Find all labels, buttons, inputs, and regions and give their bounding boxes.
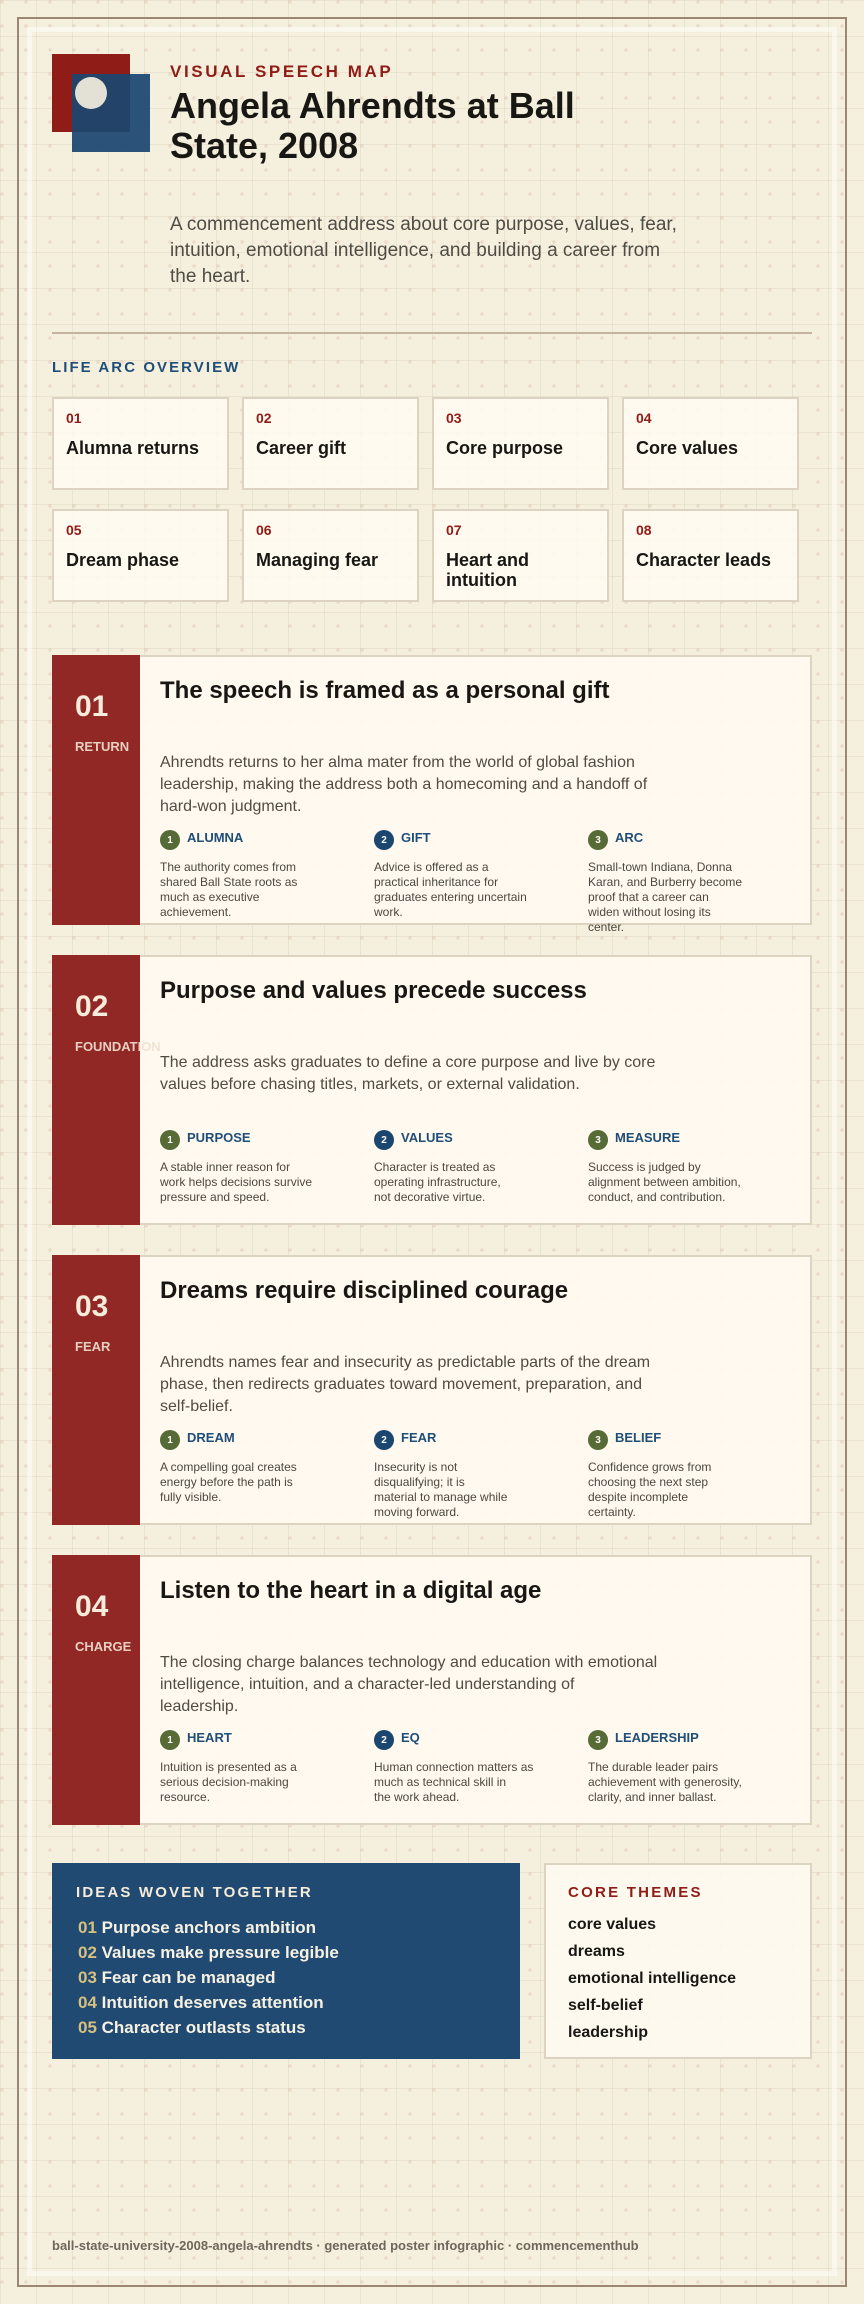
card 01 xyxy=(52,397,229,490)
section text: phase, then redirects graduates toward movement, preparation, and xyxy=(160,1376,642,1393)
card 02: Career gift xyxy=(256,438,346,458)
intro text: A commencement address about core purpose, values, fear, xyxy=(170,214,677,235)
section heading: Listen to the heart in a digital age xyxy=(160,1577,541,1604)
item: eq: much as technical skill in xyxy=(374,1775,506,1789)
item: dream: 1 xyxy=(167,1435,173,1446)
title: State, 2008 xyxy=(170,125,358,166)
ideas list: 01 Purpose anchors ambition xyxy=(78,1918,316,1937)
item: alumna: shared Ball State roots as xyxy=(160,875,297,889)
item: values: Character is treated as xyxy=(374,1160,495,1174)
item: belief: Confidence grows from xyxy=(588,1460,711,1474)
panel: ideas woven together xyxy=(52,1863,520,2059)
item: heart: serious decision-making xyxy=(160,1775,289,1789)
item: heart: 1 xyxy=(167,1735,173,1746)
card 06: 06 xyxy=(256,522,272,538)
item: arc: ARC xyxy=(615,830,643,845)
section heading: Purpose and values precede success xyxy=(160,977,587,1004)
item: measure: alignment between ambition, xyxy=(588,1175,741,1189)
card 08: Character leads xyxy=(636,550,771,570)
section number band: RETURN xyxy=(75,739,129,754)
item: fear: 2 xyxy=(381,1435,387,1446)
section text: hard-won judgment. xyxy=(160,798,301,815)
item: arc xyxy=(588,830,742,934)
themes list: self-belief xyxy=(568,1997,643,2014)
ideas list: 03 Fear can be managed xyxy=(78,1968,276,1987)
ideas list xyxy=(78,1918,339,2037)
card 07: 07 xyxy=(446,522,462,538)
section number band: FOUNDATION xyxy=(75,1039,161,1054)
item: belief: certainty. xyxy=(588,1505,636,1519)
themes list: core values xyxy=(568,1916,656,1933)
eyebrow: VISUAL SPEECH MAP xyxy=(170,62,393,81)
item: alumna xyxy=(160,830,297,919)
ideas list: 05 Character outlasts status xyxy=(78,2018,306,2037)
item: purpose: PURPOSE xyxy=(187,1130,251,1145)
card 05: 05 xyxy=(66,522,82,538)
heading: life arc overview: LIFE ARC OVERVIEW xyxy=(52,359,240,376)
card 07: intuition xyxy=(446,570,517,590)
item: purpose xyxy=(160,1130,312,1204)
section text xyxy=(160,1654,657,1715)
card 04: Core values xyxy=(636,438,738,458)
section number band: 04 xyxy=(75,1590,108,1623)
item: arc: proof that a career can xyxy=(588,890,709,904)
item: dream: A compelling goal creates xyxy=(160,1460,297,1474)
item: fear xyxy=(374,1430,507,1519)
item: fear: moving forward. xyxy=(374,1505,459,1519)
panel heading: CORE THEMES xyxy=(568,1884,703,1901)
item: belief: despite incomplete xyxy=(588,1490,688,1504)
section heading: Dreams require disciplined courage xyxy=(160,1277,568,1304)
item: gift xyxy=(374,830,527,919)
item: leadership: clarity, and inner ballast. xyxy=(588,1790,717,1804)
section number band xyxy=(52,955,140,1225)
section text: leadership, making the address both a homecoming and a handoff of xyxy=(160,776,647,793)
section text xyxy=(160,754,648,815)
panel heading: IDEAS WOVEN TOGETHER xyxy=(76,1884,313,1901)
item: values xyxy=(374,1130,501,1204)
item: measure: 3 xyxy=(595,1135,601,1146)
section text xyxy=(160,1354,650,1415)
item: purpose: pressure and speed. xyxy=(160,1190,269,1204)
card 07 xyxy=(432,509,609,602)
section number band: FEAR xyxy=(75,1339,110,1354)
item: leadership: 3 xyxy=(595,1735,601,1746)
item: purpose: 1 xyxy=(167,1135,173,1146)
themes list xyxy=(568,1916,736,2041)
item: eq: EQ xyxy=(401,1730,420,1745)
ideas list: 02 Values make pressure legible xyxy=(78,1943,339,1962)
divider xyxy=(52,332,812,334)
title: Angela Ahrendts at Ball xyxy=(170,85,575,126)
item: eq: the work ahead. xyxy=(374,1790,459,1804)
item: alumna: ALUMNA xyxy=(187,830,243,845)
panel: core themes xyxy=(544,1863,812,2059)
item: belief: BELIEF xyxy=(615,1430,661,1445)
item: eq: Human connection matters as xyxy=(374,1760,533,1774)
ideas list: 04 Intuition deserves attention xyxy=(78,1993,324,2012)
section text: The closing charge balances technology and education with emotional xyxy=(160,1654,657,1671)
section text: Ahrendts names fear and insecurity as predictable parts of the dream xyxy=(160,1354,650,1371)
item: gift: Advice is offered as a xyxy=(374,860,489,874)
section number band: 01 xyxy=(75,690,108,723)
section text: The address asks graduates to define a core purpose and live by core xyxy=(160,1054,655,1071)
card 01: Alumna returns xyxy=(66,438,199,458)
section text: Ahrendts returns to her alma mater from the world of global fashion xyxy=(160,754,635,771)
section number band: CHARGE xyxy=(75,1639,131,1654)
section number band xyxy=(52,655,140,925)
item: leadership: The durable leader pairs xyxy=(588,1760,718,1774)
card 05 xyxy=(52,509,229,602)
item: values: 2 xyxy=(381,1135,387,1146)
intro text: intuition, emotional intelligence, and building a career from xyxy=(170,240,660,261)
section number band xyxy=(52,1255,140,1525)
panel: section 02 xyxy=(52,955,812,1225)
item: leadership xyxy=(588,1730,742,1804)
card 02 xyxy=(242,397,419,490)
item: measure: Success is judged by xyxy=(588,1160,701,1174)
item: gift: practical inheritance for xyxy=(374,875,498,889)
item: dream: fully visible. xyxy=(160,1490,221,1504)
item: values: VALUES xyxy=(401,1130,453,1145)
card 06: Managing fear xyxy=(256,550,378,570)
section text: leadership. xyxy=(160,1698,238,1715)
item: belief xyxy=(588,1430,711,1519)
item: fear: material to manage while xyxy=(374,1490,507,1504)
item: dream: energy before the path is xyxy=(160,1475,293,1489)
item: eq xyxy=(374,1730,533,1804)
icon: overlapping squares logo xyxy=(52,54,150,152)
item: gift: work. xyxy=(374,905,403,919)
item: gift: graduates entering uncertain xyxy=(374,890,527,904)
card 08: 08 xyxy=(636,522,652,538)
section text: values before chasing titles, markets, or external validation. xyxy=(160,1076,580,1093)
item: fear: Insecurity is not xyxy=(374,1460,457,1474)
intro text xyxy=(170,214,677,287)
section number band: 02 xyxy=(75,990,108,1023)
themes list: dreams xyxy=(568,1943,625,1960)
card 03: Core purpose xyxy=(446,438,563,458)
item: leadership: LEADERSHIP xyxy=(615,1730,699,1745)
item: arc: Karan, and Burberry become xyxy=(588,875,742,889)
themes list: leadership xyxy=(568,2024,648,2041)
card 04 xyxy=(622,397,799,490)
item: alumna: 1 xyxy=(167,835,173,846)
item: heart: Intuition is presented as a xyxy=(160,1760,297,1774)
panel: section 04 xyxy=(52,1555,812,1825)
item: fear: FEAR xyxy=(401,1430,436,1445)
intro text: the heart. xyxy=(170,266,250,287)
item: heart: resource. xyxy=(160,1790,210,1804)
footer: ball-state-university-2008-angela-ahrendts · generated poster infographic · commencementhub xyxy=(52,2238,639,2253)
item: leadership: achievement with generosity, xyxy=(588,1775,742,1789)
item: eq: 2 xyxy=(381,1735,387,1746)
item: values: not decorative virtue. xyxy=(374,1190,485,1204)
item: belief: choosing the next step xyxy=(588,1475,708,1489)
card 07: Heart and xyxy=(446,550,529,570)
item: purpose: A stable inner reason for xyxy=(160,1160,290,1174)
section number band: 03 xyxy=(75,1290,108,1323)
section text xyxy=(160,1054,655,1093)
item: gift: 2 xyxy=(381,835,387,846)
item: belief: 3 xyxy=(595,1435,601,1446)
item: alumna: much as executive xyxy=(160,890,259,904)
section text: intelligence, intuition, and a character-led understanding of xyxy=(160,1676,574,1693)
card 06 xyxy=(242,509,419,602)
item: arc: widen without losing its xyxy=(588,905,711,919)
item: alumna: achievement. xyxy=(160,905,231,919)
section number band xyxy=(52,1555,140,1825)
text: center. xyxy=(588,920,624,934)
item: arc: 3 xyxy=(595,835,601,846)
item: heart: HEART xyxy=(187,1730,232,1745)
card 08 xyxy=(622,509,799,602)
card 01: 01 xyxy=(66,410,82,426)
card 04: 04 xyxy=(636,410,652,426)
item: fear: disqualifying; it is xyxy=(374,1475,465,1489)
panel: life arc cards xyxy=(52,397,799,602)
card 05: Dream phase xyxy=(66,550,179,570)
item: purpose: work helps decisions survive xyxy=(160,1175,312,1189)
card 02: 02 xyxy=(256,410,272,426)
item: measure xyxy=(588,1130,741,1204)
item: arc: Small-town Indiana, Donna xyxy=(588,860,732,874)
item: dream: DREAM xyxy=(187,1430,235,1445)
item: heart xyxy=(160,1730,297,1804)
section text: self-belief. xyxy=(160,1398,233,1415)
item: values: operating infrastructure, xyxy=(374,1175,501,1189)
item: measure: MEASURE xyxy=(615,1130,680,1145)
item: gift: GIFT xyxy=(401,830,431,845)
item: measure: conduct, and contribution. xyxy=(588,1190,725,1204)
item: dream xyxy=(160,1430,297,1504)
item: alumna: The authority comes from xyxy=(160,860,296,874)
card 03 xyxy=(432,397,609,490)
themes list: emotional intelligence xyxy=(568,1970,736,1987)
panel: section 03 xyxy=(52,1255,812,1525)
panel: section 01 xyxy=(52,655,812,934)
section heading: The speech is framed as a personal gift xyxy=(160,677,609,704)
title xyxy=(170,85,575,166)
card 03: 03 xyxy=(446,410,462,426)
